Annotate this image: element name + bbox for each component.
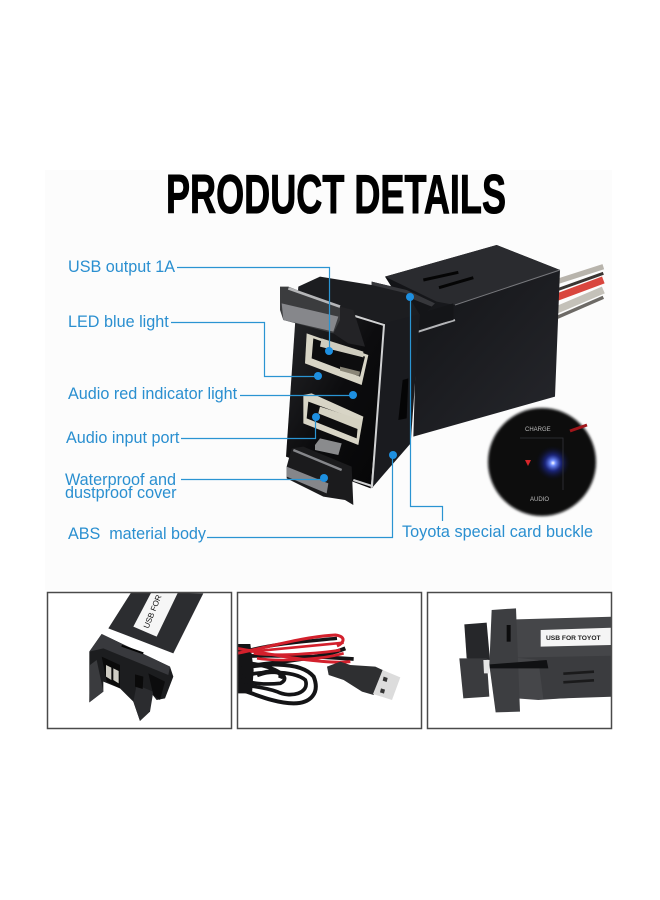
bottom cover [287,447,353,505]
callout: ABS material body: ABS material body [68,525,207,543]
thumbnail: module front view [48,576,232,728]
side of face [372,314,420,488]
wires [555,267,603,318]
thumbnail: wires and USB plug [237,592,422,728]
callout: Audio red indicator light [68,385,357,403]
callout: USB output 1A [68,258,333,355]
inset photo: charge and audio indicator: CHARGE [525,427,551,433]
callout: Audio input port: Audio input port [66,429,180,447]
callout: LED blue light: LED blue light [68,313,169,331]
USB port upper [305,333,368,385]
callout: Toyota special card buckle: Toyota special card buckle [402,523,593,541]
callout: Waterproof and dustproof cover: dustproof cover [65,484,177,502]
thumbnail: module front view: USB FOR TOY [142,576,171,630]
product photo: USB switch module [280,245,603,505]
callout: Audio input port [66,413,320,447]
callout: Toyota special card buckle [402,293,593,541]
rear housing [385,245,560,437]
thumbnail: module side view: USB FOR TOYOT [546,635,601,642]
front face [286,315,385,488]
top flap [333,307,365,347]
background panel [45,170,612,590]
callout: LED blue light [68,313,322,380]
inset photo: charge and audio indicator [488,408,596,516]
upper block [295,277,420,325]
USB port lower [303,393,363,445]
callout: USB output 1A: USB output 1A [68,258,175,276]
callout: ABS material body [68,451,397,543]
callout: Waterproof and dustproof cover: Waterproof and [65,471,176,489]
thumbnail: module side view [428,592,613,728]
callout: Waterproof and dustproof cover [65,471,328,502]
inset photo: charge and audio indicator: AUDIO [530,497,549,503]
buckle [372,282,453,328]
callout: Audio red indicator light: Audio red indicator light [68,385,238,403]
